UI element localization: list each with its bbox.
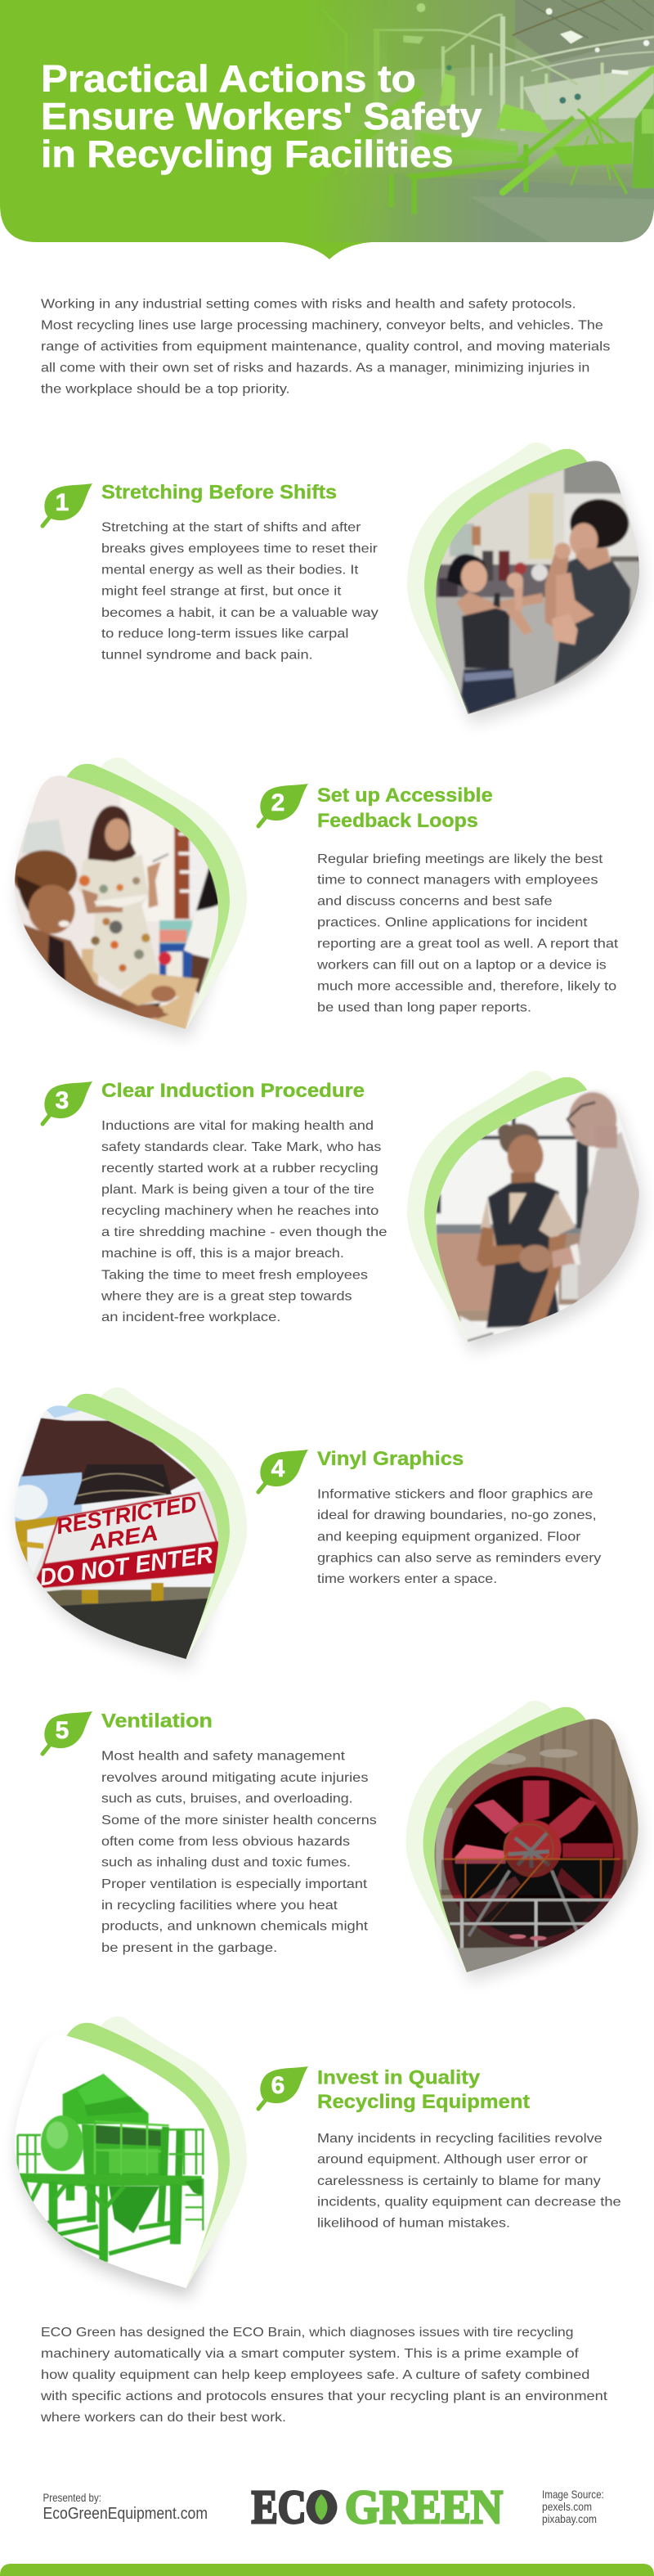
leaf photo: restricted area sign: RESTRICTED <box>55 1490 199 1539</box>
text block: vinyl <box>317 1487 601 1586</box>
footer: eco green logo <box>252 2480 503 2533</box>
text block: feedback <box>316 852 619 1015</box>
heading: stretching before shifts: Stretching Before Shifts <box>101 481 337 503</box>
text block: induction: a tire shredding machine - even though the <box>101 1225 387 1239</box>
text block: induction: plant. Mark is being given a tour of the tire <box>101 1183 374 1197</box>
icon: leaf number 4 <box>258 1450 308 1492</box>
right person <box>196 865 221 910</box>
text block: induction: machine is off, this is a major breach. <box>101 1247 344 1261</box>
closing paragraph: where workers can do their best work. <box>40 2411 286 2425</box>
footer: image source: pexels.com <box>542 2500 592 2513</box>
text block: feedback: practices. Online applications for incident <box>317 915 588 929</box>
text block: feedback: and discuss concerns and best safe <box>317 895 553 909</box>
text block: vinyl: graphics can also serve as reminders every <box>317 1551 601 1566</box>
leaf photo: handshake <box>401 1063 654 1360</box>
heading: invest in quality recycling equipment <box>317 2067 530 2113</box>
intro paragraph: range of activities from equipment maintenance, quality control, and moving materials <box>41 339 610 353</box>
section 2: feedback loops <box>0 753 619 1047</box>
leaf photo: restricted area sign: AREA <box>87 1520 160 1556</box>
heading: vinyl graphics: Vinyl Graphics <box>317 1448 464 1470</box>
text block: vinyl: Informative stickers and floor graphics are <box>317 1487 594 1501</box>
section 4: vinyl graphics <box>0 1382 601 1679</box>
text block: ventilation: such as inhaling dust and toxic fumes. <box>101 1856 351 1870</box>
footer: eco green logo: ECO <box>252 2480 337 2533</box>
text block: stretching: breaks gives employees time to reset their <box>101 542 378 556</box>
closing paragraph <box>40 2326 608 2425</box>
man <box>578 1131 640 1306</box>
footer: eco green logo: GREEN <box>345 2480 503 2533</box>
text block: feedback: much more accessible and, therefore, likely to <box>317 979 616 993</box>
footer: presented by: EcoGreenEquipment.com <box>43 2505 208 2523</box>
standing woman <box>87 805 137 863</box>
icon: leaf number 6: 6 <box>271 2072 284 2099</box>
text block: stretching: to reduce long-term issues like carpal <box>101 627 348 641</box>
icon: leaf inside the O <box>306 2490 337 2524</box>
text block: equipment: incidents, quality equipment can decrease the <box>317 2196 621 2210</box>
footer: presented by: Presented by: <box>43 2491 101 2504</box>
text block: stretching: might feel strange at first, but once it <box>101 585 342 599</box>
main title: in Recycling Facilities <box>41 133 454 175</box>
closing paragraph: how quality equipment can help keep employees safe. A culture of safety combined <box>41 2368 589 2382</box>
footer: image source: Image Source: <box>542 2488 604 2501</box>
text block: induction <box>101 1119 387 1324</box>
text block: ventilation: Most health and safety management <box>101 1750 346 1764</box>
text block: ventilation: such as cuts, bruises, and overloading. <box>101 1792 353 1806</box>
leaf photo: restricted area sign <box>13 1387 247 1670</box>
section 3: clear induction procedure <box>43 1063 654 1360</box>
text block: stretching: tunnel syndrome and back pain. <box>101 649 313 663</box>
text block: ventilation: in recycling facilities where you heat <box>101 1899 338 1913</box>
leaf photo: two people stretching <box>401 442 654 736</box>
text block: ventilation <box>101 1750 377 1955</box>
icon: leaf number 2: 2 <box>271 789 284 816</box>
text block: stretching <box>101 520 379 663</box>
text block: vinyl: and keeping equipment organized. Floor <box>317 1530 581 1544</box>
text block: feedback: Regular briefing meetings are likely the best <box>317 852 603 866</box>
intro paragraph: Most recycling lines use large processing machinery, conveyor belts, and vehicles. The <box>41 319 603 332</box>
leaf photo: green shredder machine <box>15 2016 247 2298</box>
heading: set up accessible feedback loops: Set up Accessible <box>317 784 493 807</box>
main title: Practical Actions to <box>41 57 416 100</box>
text block: feedback: time to connect managers with employees <box>317 874 598 887</box>
text block: ventilation: be present in the garbage. <box>101 1941 277 1955</box>
text block: stretching: Stretching at the start of shifts and after <box>101 520 361 535</box>
woman <box>498 1124 513 1140</box>
text block: feedback: workers can fill out on a laptop or a device is <box>316 959 607 973</box>
text block: stretching: mental energy as well as their bodies. It <box>101 563 359 577</box>
intro paragraph <box>41 298 610 396</box>
leaf photo: meeting with colleagues <box>13 758 247 1041</box>
icon: leaf number 4: 4 <box>271 1455 285 1482</box>
text block: induction: Taking the time to meet fresh employees <box>101 1268 368 1282</box>
intro paragraph: the workplace should be a top priority. <box>41 382 290 396</box>
icon: leaf number 5 <box>43 1711 92 1754</box>
header banner <box>0 0 654 259</box>
intro paragraph: all come with their own set of risks and hazards. As a manager, minimizing injuries in <box>41 361 589 375</box>
heading: set up accessible feedback loops <box>317 784 493 832</box>
sitting woman <box>15 849 78 893</box>
heading: clear induction procedure: Clear Induction Procedure <box>101 1080 365 1102</box>
icon: leaf number 5: 5 <box>56 1717 69 1744</box>
text block: ventilation: revolves around mitigating acute injuries <box>101 1771 368 1785</box>
icon: leaf number 1 <box>43 483 92 526</box>
footer: presented by <box>43 2491 208 2523</box>
text block: ventilation: products, and unknown chemicals might <box>101 1920 369 1934</box>
text block: induction: Inductions are vital for making health and <box>101 1119 374 1133</box>
text block: induction: an incident-free workplace. <box>101 1310 280 1324</box>
footer bar <box>0 2564 654 2576</box>
text block: stretching: becomes a habit, it can be a valuable way <box>101 606 379 620</box>
heading: set up accessible feedback loops: Feedback Loops <box>317 810 478 832</box>
icon: leaf number 3 <box>43 1081 92 1124</box>
text block: equipment: Many incidents in recycling facilities revolve <box>317 2132 602 2146</box>
main title: Ensure Workers' Safety <box>41 95 482 137</box>
header photo: recycling plant <box>278 0 654 245</box>
main title <box>41 57 482 175</box>
closing paragraph: machinery automatically via a smart computer system. This is a prime example of <box>41 2347 579 2361</box>
icon: leaf number 1: 1 <box>56 489 69 516</box>
intro paragraph: Working in any industrial setting comes with risks and health and safety protocols. <box>41 298 576 311</box>
footer: image source <box>542 2488 604 2525</box>
leaf photo: red industrial fan <box>401 1685 654 1982</box>
closing paragraph: ECO Green has designed the ECO Brain, which diagnoses issues with tire recycling <box>41 2326 574 2340</box>
text block: ventilation: often come from less obvious hazards <box>101 1835 350 1849</box>
section 6: quality recycling equipment <box>15 2016 621 2298</box>
text block: induction: recycling machinery when he reaches into <box>101 1204 379 1218</box>
man <box>554 556 631 685</box>
heading: invest in quality recycling equipment: Invest in Quality <box>317 2067 481 2089</box>
heading: invest in quality recycling equipment: Recycling Equipment <box>317 2091 530 2113</box>
text block: induction: safety standards clear. Take Mark, who has <box>101 1140 381 1154</box>
closing paragraph: with specific actions and protocols ensures that your recycling plant is an environment <box>40 2389 608 2403</box>
leaf photo: restricted area sign: DO NOT ENTER <box>38 1541 214 1591</box>
icon: leaf number 3: 3 <box>56 1087 69 1114</box>
table <box>114 973 199 1031</box>
section 5: ventilation <box>43 1685 654 1982</box>
section 1: stretching before shifts <box>43 442 654 736</box>
text block: ventilation: Some of the more sinister health concerns <box>101 1814 377 1827</box>
text block: induction: recently started work at a rubber recycling <box>101 1162 379 1176</box>
footer: image source: pixabay.com <box>542 2512 597 2525</box>
text block: equipment: around equipment. Although user error or <box>317 2153 589 2167</box>
text block: equipment: carelessness is certainly to blame for many <box>317 2174 601 2188</box>
text block: equipment <box>317 2132 621 2231</box>
text block: feedback: reporting are a great tool as well. A report that <box>317 937 619 951</box>
text block: induction: where they are is a great step towards <box>101 1289 352 1304</box>
icon: leaf number 2 <box>258 784 308 826</box>
text block: vinyl: time workers enter a space. <box>317 1572 497 1586</box>
text block: ventilation: Proper ventilation is especially important <box>101 1877 368 1891</box>
text block: equipment: likelihood of human mistakes. <box>317 2217 510 2231</box>
text block: vinyl: ideal for drawing boundaries, no-go zones, <box>317 1508 597 1522</box>
heading: ventilation: Ventilation <box>101 1710 213 1733</box>
woman <box>447 554 486 589</box>
text block: feedback: be used than long paper reports. <box>317 1001 531 1015</box>
icon: leaf number 6 <box>258 2066 308 2109</box>
